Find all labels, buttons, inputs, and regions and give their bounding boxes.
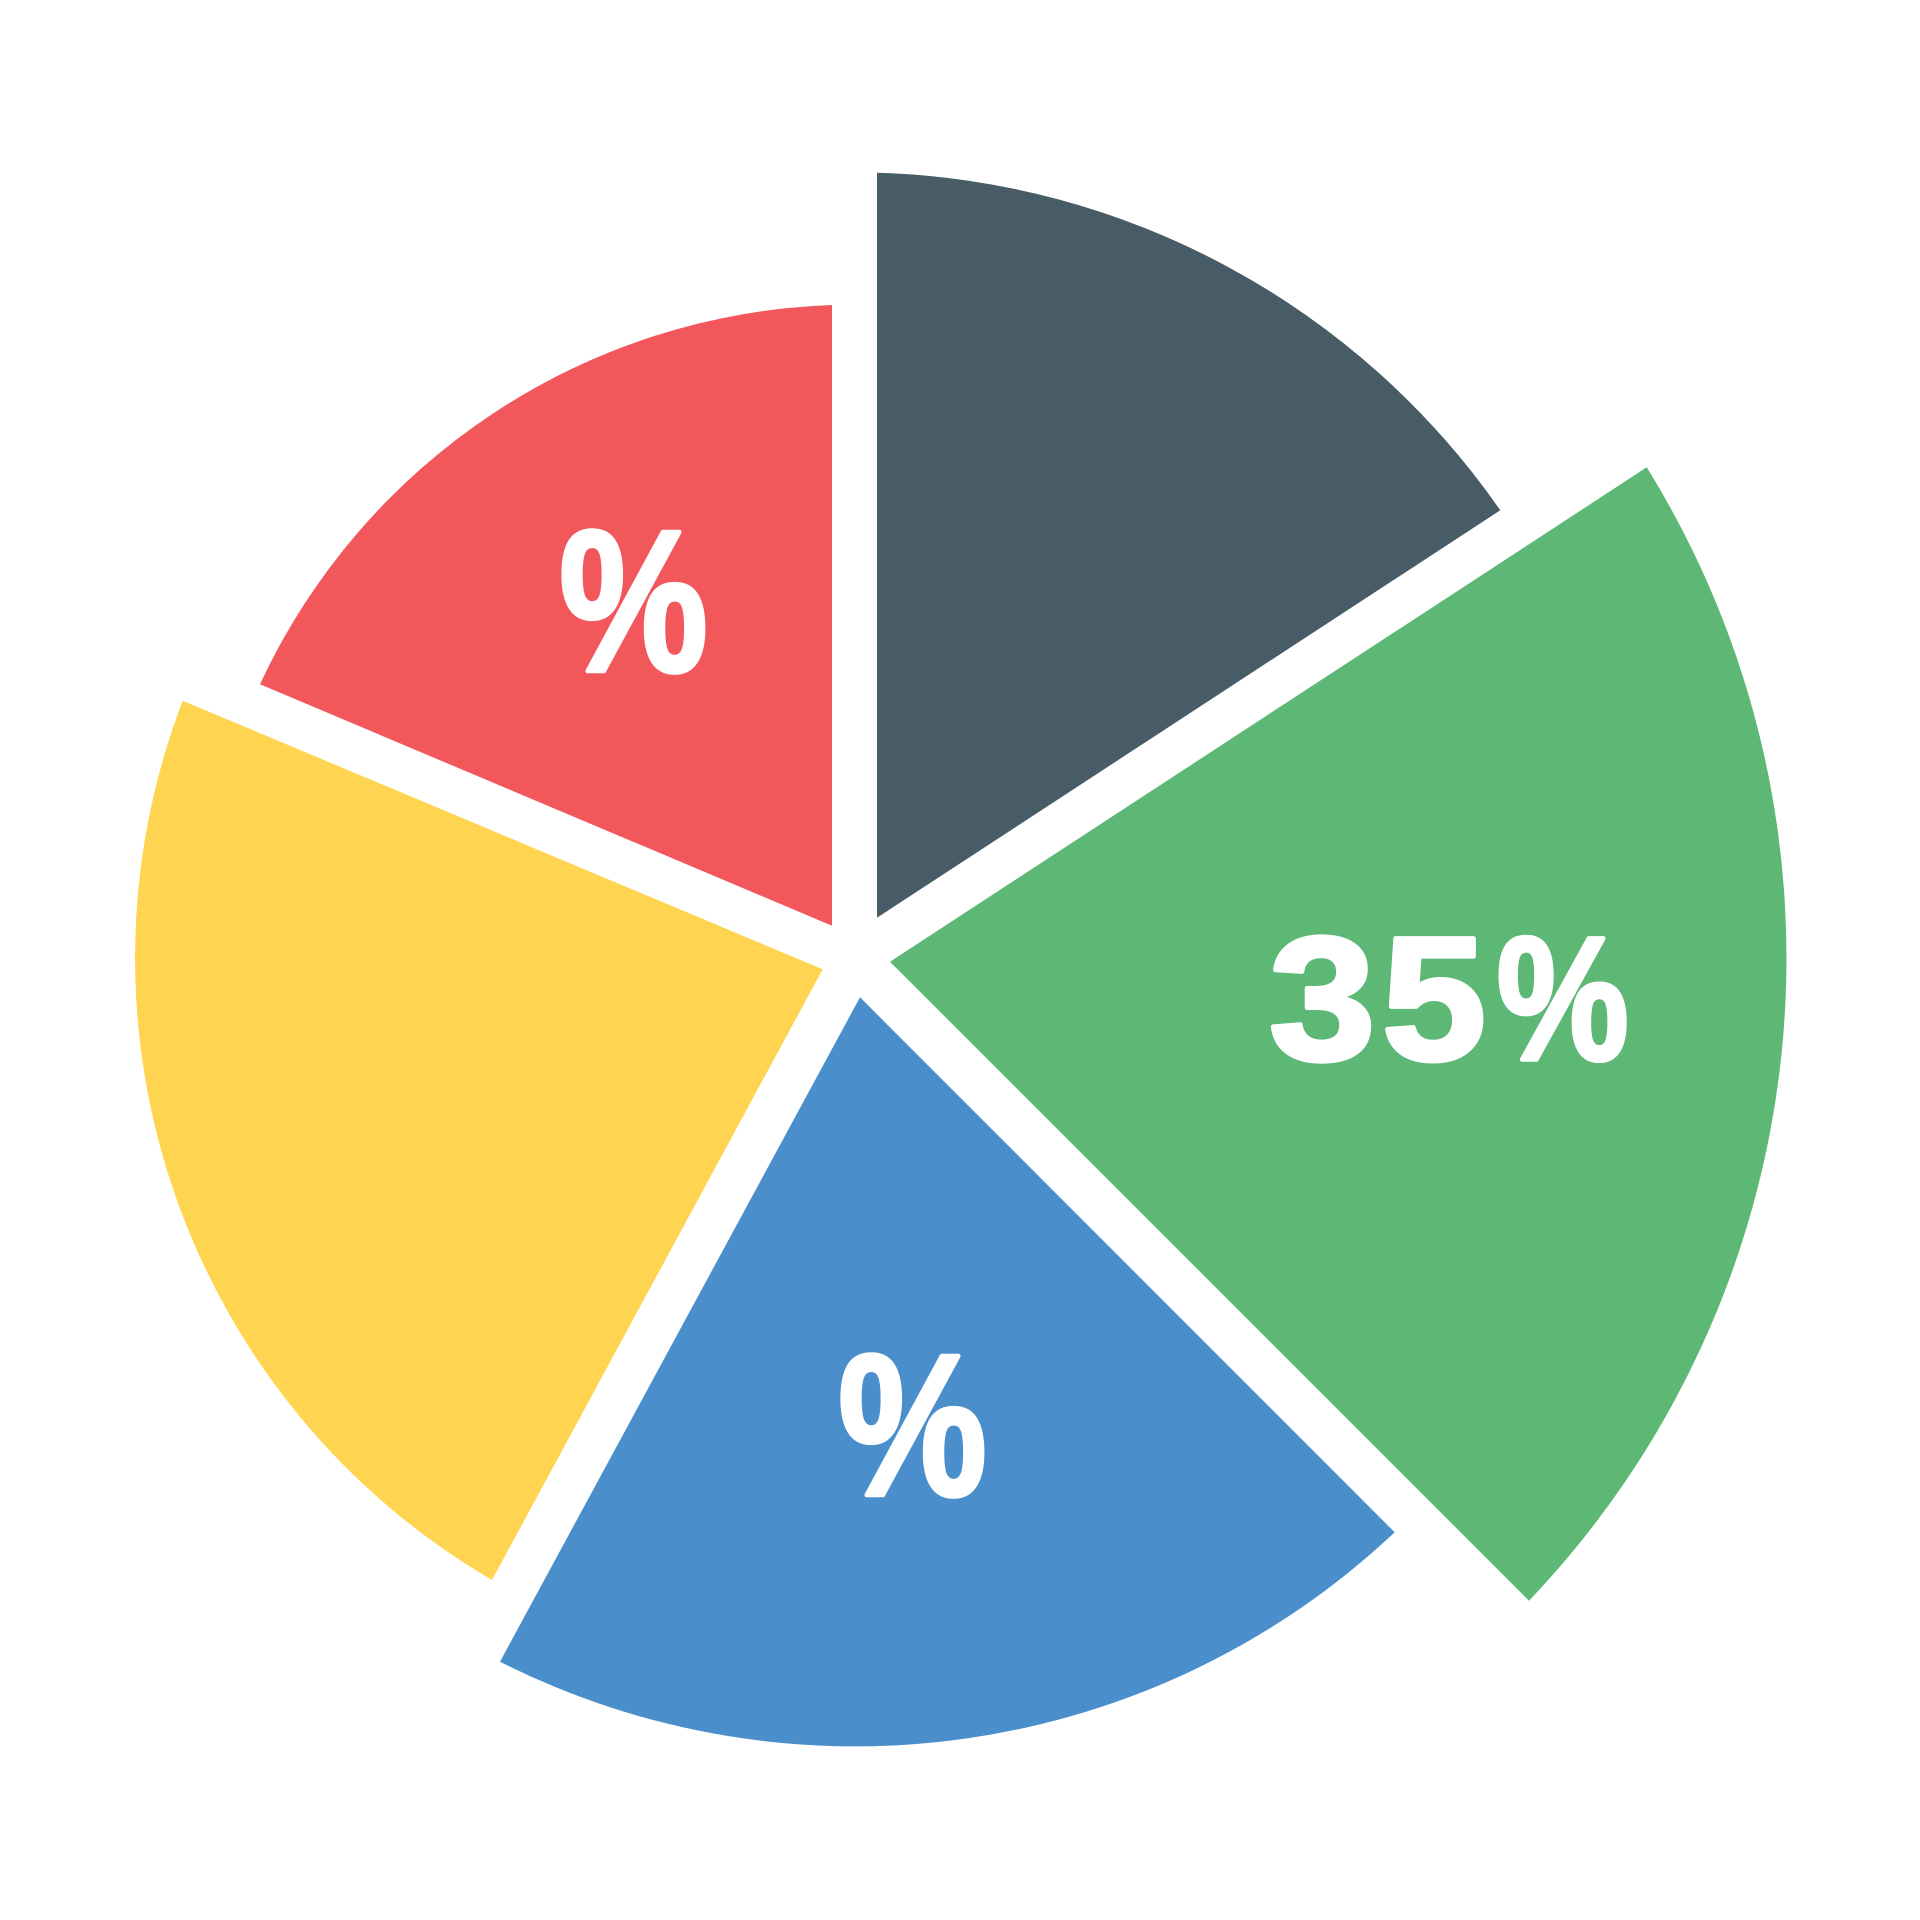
slice: red — [260, 305, 832, 926]
label: green 35 percent — [1269, 900, 1629, 1098]
slice: dark slate — [877, 173, 1500, 918]
label: green 35 percent: % — [1497, 901, 1629, 1097]
slice: yellow — [135, 701, 823, 1580]
slice: blue — [500, 997, 1395, 1746]
label: green 35 percent: 3 — [1269, 901, 1376, 1098]
slice: green — [890, 467, 1786, 1601]
label: red percent: % — [559, 489, 708, 715]
label: green 35 percent: 5 — [1382, 900, 1486, 1097]
label: blue percent: % — [838, 1313, 987, 1539]
